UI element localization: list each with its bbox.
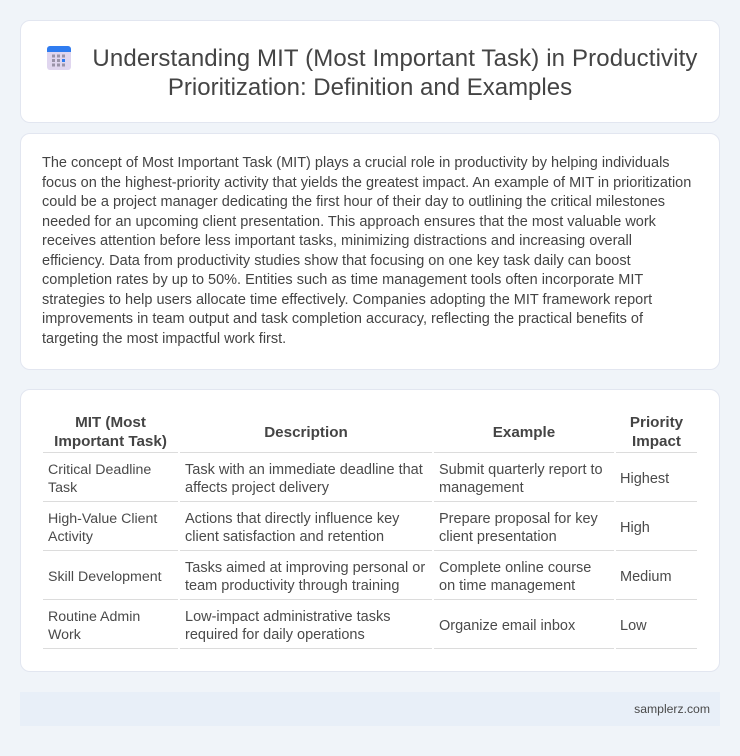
row: Skill Development: Complete online course bbox=[439, 560, 591, 576]
row: Routine Admin Work: Organize email inbox bbox=[439, 618, 575, 634]
intro text: improvements in team output and task completion accuracy, reflecting the practical benefits of bbox=[42, 311, 643, 327]
table header: Example bbox=[493, 424, 555, 441]
table header: Important Task) bbox=[54, 433, 167, 450]
row: Routine Admin Work: Work bbox=[48, 627, 81, 643]
row: Skill Development: Medium bbox=[620, 569, 672, 585]
row: Skill Development: Tasks aimed at improving personal or bbox=[185, 560, 425, 576]
panel: intro paragraph bbox=[20, 133, 720, 370]
intro text: The concept of Most Important Task (MIT) plays a crucial role in productivity by helping individuals bbox=[42, 155, 670, 171]
row: Critical Deadline Task: Critical Deadline bbox=[48, 462, 151, 478]
table bbox=[43, 414, 697, 649]
row: High-Value Client Activity bbox=[48, 511, 650, 545]
row: Critical Deadline Task: Highest bbox=[620, 471, 669, 487]
intro text: strategies to help users allocate time effectively. Companies adopting the MIT framework report bbox=[42, 292, 652, 308]
row: Skill Development: Skill Development bbox=[48, 569, 162, 585]
row: Routine Admin Work: Low bbox=[620, 618, 647, 634]
table header: Description bbox=[264, 424, 348, 441]
row: High-Value Client Activity: High bbox=[620, 520, 650, 536]
title: Prioritization: Definition and Examples bbox=[168, 74, 572, 101]
title: Understanding MIT (Most Important Task) in Productivity bbox=[92, 45, 698, 72]
table header bbox=[54, 414, 683, 450]
intro text: needed for an upcoming client presentation. This approach ensures that the most valuable work bbox=[42, 214, 656, 230]
row: Skill Development: team productivity through training bbox=[185, 578, 399, 594]
table header: MIT (Most bbox=[75, 414, 146, 431]
intro text: could be a project manager dedicating the first hour of their day to outlining the critical milestones bbox=[42, 194, 665, 210]
intro text: completion rates by up to 50%. Entities such as time management tools often incorporate MIT bbox=[42, 272, 643, 288]
row: Routine Admin Work: Low-impact administrative tasks bbox=[185, 609, 390, 625]
intro text: focus on the highest-priority activity that yields the greatest impact. An example of MIT in prioritization bbox=[42, 175, 691, 191]
row: Critical Deadline Task: affects project delivery bbox=[185, 480, 329, 496]
row: Skill Development: on time management bbox=[439, 578, 575, 594]
row: High-Value Client Activity: Prepare proposal for key bbox=[439, 511, 598, 527]
panel: table card bbox=[20, 389, 720, 672]
row: High-Value Client Activity: High-Value Client bbox=[48, 511, 157, 527]
row: Routine Admin Work: required for daily operations bbox=[185, 627, 365, 643]
row: Routine Admin Work bbox=[48, 609, 647, 643]
intro text: targeting the most impactful work first. bbox=[42, 331, 286, 347]
intro text: efficiency. Data from productivity studies show that focusing on one key task daily can boost bbox=[42, 253, 631, 269]
icon: calendar bbox=[47, 46, 71, 70]
intro text bbox=[42, 155, 691, 347]
row: Critical Deadline Task: Submit quarterly report to bbox=[439, 462, 603, 478]
table header: Priority bbox=[630, 414, 683, 431]
row: High-Value Client Activity: Activity bbox=[48, 529, 93, 545]
footer text: samplerz.com: samplerz.com bbox=[634, 702, 710, 716]
table header: Impact bbox=[632, 433, 681, 450]
row: High-Value Client Activity: client presentation bbox=[439, 529, 557, 545]
row: Critical Deadline Task: Task with an immediate deadline that bbox=[185, 462, 423, 478]
row: High-Value Client Activity: Actions that directly influence key bbox=[185, 511, 399, 527]
row: Critical Deadline Task: management bbox=[439, 480, 524, 496]
footer bar bbox=[20, 692, 720, 726]
row: Skill Development bbox=[48, 560, 672, 594]
intro text: receives attention before less important tasks, minimizing distractions and increasing overall bbox=[42, 233, 632, 249]
row: Routine Admin Work: Routine Admin bbox=[48, 609, 140, 625]
header card bbox=[20, 20, 720, 123]
row: High-Value Client Activity: client satisfaction and retention bbox=[185, 529, 384, 545]
row: Critical Deadline Task bbox=[48, 462, 670, 496]
title bbox=[92, 45, 698, 101]
row: Critical Deadline Task: Task bbox=[48, 480, 77, 496]
